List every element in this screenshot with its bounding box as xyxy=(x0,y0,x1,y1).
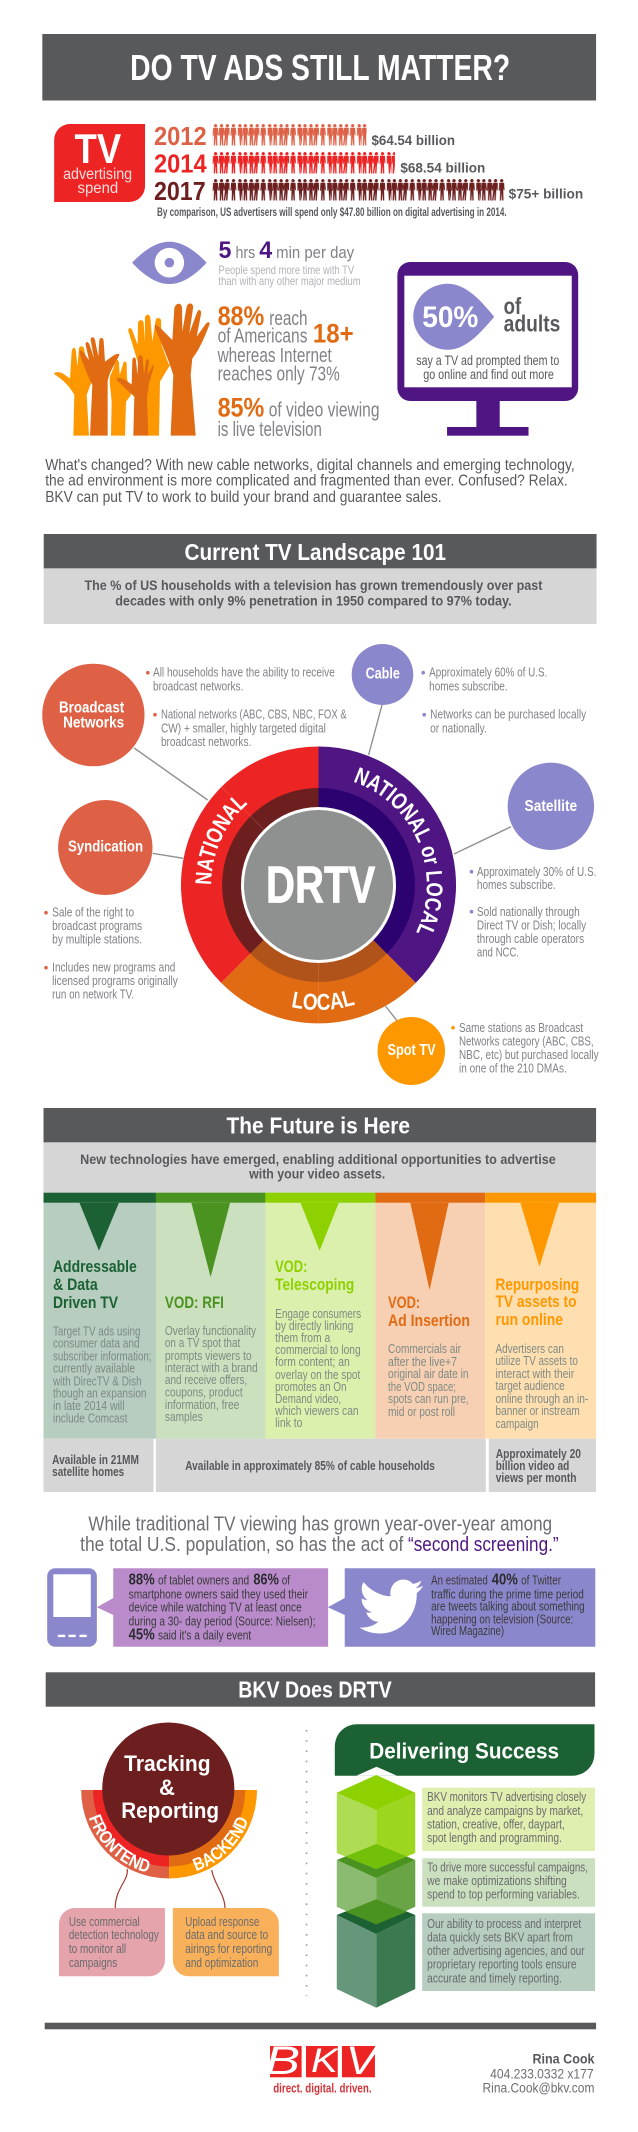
column: VOD Ad Insertion: spots can run pre, xyxy=(388,1392,469,1406)
availability row: Available in 21MM xyxy=(52,1452,139,1467)
callout: Broadcast Networks: Networks xyxy=(63,715,124,732)
stat: live television: is live television xyxy=(218,419,322,441)
chart: DRTV donut: LOCAL xyxy=(292,991,355,1010)
panel: Twitter stat: Wired Magazine) xyxy=(431,1623,504,1638)
contact details: 404.233.0332 x177 xyxy=(490,2067,594,2082)
icon: TV monitor with 50% of adults xyxy=(397,262,578,436)
callout: Syndication: Includes new programs and xyxy=(52,960,175,975)
callout: Syndication: Syndication xyxy=(68,839,143,856)
logo: BKV xyxy=(265,2039,380,2096)
stat: hours per day: than with any other major medium xyxy=(219,276,361,288)
callout: Satellite: Sold nationally through xyxy=(477,904,580,919)
column: VOD RFI: Overlay functionality xyxy=(165,1324,257,1338)
text block: monitoring: BKV monitors TV advertising closely xyxy=(427,1789,587,1804)
panel: section header Current TV Landscape 101: The % of US households with a television has grown tremendously over past xyxy=(84,578,543,593)
icon: TV monitor with 50% of adults: go online and find out more xyxy=(423,366,554,382)
heading: second screening xyxy=(80,1514,559,1556)
stat: reach of Americans: reach xyxy=(269,308,307,330)
stat: reach of Americans: 18+ xyxy=(313,319,354,349)
column: VOD Telescoping: Telescoping xyxy=(275,1275,354,1294)
panel: TV advertising spend xyxy=(54,123,583,219)
icon: TV monitor with 50% of adults: 50% xyxy=(422,301,478,334)
chart: DRTV donut xyxy=(180,746,456,1024)
column: Repurposing TV assets to run online: TV assets to xyxy=(496,1292,577,1311)
text block: monitoring: station, creative, offer, daypart, xyxy=(427,1816,565,1831)
contact details: Rina Cook xyxy=(532,2052,595,2067)
panel: Tracking and Reporting: & xyxy=(159,1775,175,1800)
panel: section header The Future is Here: with your video assets. xyxy=(248,1167,385,1182)
column: VOD Telescoping: by directly linking xyxy=(275,1319,353,1333)
availability row: Available in approximately 85% of cable households xyxy=(185,1458,435,1473)
callout: Cable: or nationally. xyxy=(430,721,487,736)
panel: Tracking and Reporting: Tracking xyxy=(124,1751,211,1776)
text block: optimization xyxy=(422,1858,595,1907)
column: VOD RFI: and receive offers, xyxy=(165,1373,247,1387)
badge: TV advertising spend: TV xyxy=(75,125,121,172)
panel: section header Current TV Landscape 101 xyxy=(44,534,597,624)
column: VOD Telescoping: Engage consumers xyxy=(275,1307,361,1321)
callout: Satellite: Satellite xyxy=(525,798,577,815)
card: backend xyxy=(173,1908,279,1976)
text block: optimization: spend to top performing variables. xyxy=(427,1886,580,1901)
row: 2012 spend xyxy=(154,123,455,151)
callout: Satellite xyxy=(470,763,596,960)
availability row: views per month xyxy=(496,1470,577,1485)
callout: Syndication: Sale of the right to xyxy=(52,905,134,920)
chart: DRTV donut: DRTV xyxy=(266,855,376,913)
panel: Tracking and Reporting: Reporting xyxy=(121,1798,219,1823)
logo: BKV: direct. digital. driven. xyxy=(273,2082,372,2096)
heading: second screening: While traditional TV viewing has grown year-over-year among xyxy=(88,1514,552,1536)
icon: TV monitor with 50% of adults: of xyxy=(504,293,521,319)
icon: raised hands xyxy=(54,304,210,436)
callout: Cable: Networks can be purchased locally xyxy=(430,707,587,722)
badge: TV advertising spend: spend xyxy=(77,180,118,197)
column: VOD Telescoping: overlay on the spot xyxy=(275,1368,361,1382)
panel: section header Current TV Landscape 101: Current TV Landscape 101 xyxy=(184,539,446,565)
logo: BKV: K xyxy=(311,2042,339,2080)
column: Repurposing TV assets to run online: banner or instream xyxy=(496,1404,580,1418)
column: Addressable and Data Driven TV: Target TV ads using xyxy=(53,1324,141,1338)
column: VOD Telescoping: link to xyxy=(275,1416,303,1430)
text block: optimization: we make optimizations shifting xyxy=(426,1873,567,1888)
panel: tablet and smartphone stat: said it's a daily event xyxy=(158,1627,252,1642)
column: VOD Ad Insertion: mid or post roll xyxy=(388,1405,455,1419)
callout: Satellite: through cable operators xyxy=(477,931,584,946)
column: Repurposing TV assets to run online: Repurposing xyxy=(496,1275,579,1294)
intro paragraph: BKV can put TV to work to build your brand and guarantee sales. xyxy=(45,489,442,506)
row: 2012 spend: 2012 xyxy=(154,123,207,151)
comparison note: By comparison, US advertisers will spend only $47.80 billion on digital advertising in 2014. xyxy=(157,207,507,219)
column: VOD RFI xyxy=(156,1193,265,1439)
heading: second screening: the total U.S. population, so has the act of xyxy=(80,1534,404,1556)
banner: Delivering Success: Delivering Success xyxy=(369,1738,559,1763)
stat: reach of Americans: whereas Internet xyxy=(217,345,332,367)
callout: Spot TV: in one of the 210 DMAs. xyxy=(459,1061,567,1076)
stat: live television: of video viewing xyxy=(269,400,380,422)
column: Repurposing TV assets to run online: run online xyxy=(496,1310,563,1329)
panel: Twitter stat: happening on television (Source: xyxy=(431,1611,573,1626)
availability row: billion video ad xyxy=(496,1458,569,1473)
badge: TV advertising spend xyxy=(54,124,145,202)
column: VOD Ad Insertion: VOD: xyxy=(388,1293,420,1312)
text block: monitoring xyxy=(422,1788,595,1851)
column: Addressable and Data Driven TV: include Comcast xyxy=(53,1412,128,1426)
text block: reporting tools: accurate and timely reporting. xyxy=(427,1971,562,1986)
column: Repurposing TV assets to run online: utilize TV assets to xyxy=(496,1354,578,1368)
icon: smartphone xyxy=(47,1568,97,1647)
column: Addressable and Data Driven TV: Driven TV xyxy=(53,1293,119,1312)
column: Repurposing TV assets to run online: target audience xyxy=(496,1379,565,1393)
stat: hours per day: People spend more time with TV xyxy=(219,265,354,277)
column: VOD Telescoping xyxy=(265,1193,375,1439)
card: backend: airings for reporting xyxy=(185,1941,272,1956)
column: VOD RFI: information, free xyxy=(165,1398,239,1412)
column: Addressable and Data Driven TV: subscriber information; xyxy=(53,1350,152,1364)
stat: reach of Americans: of Americans xyxy=(218,326,308,348)
callout: Broadcast Networks: broadcast networks. xyxy=(161,734,251,749)
section header: BKV Does DRTV xyxy=(46,1672,595,1707)
card: frontend: detection technology xyxy=(69,1927,159,1942)
column: Repurposing TV assets to run online: interact with their xyxy=(496,1367,574,1381)
callout: Spot TV: Networks category (ABC, CBS, xyxy=(459,1034,594,1049)
availability row: Approximately 20 xyxy=(496,1446,581,1461)
stat: hours per day: min per day xyxy=(276,243,355,262)
panel: Delivering Success xyxy=(335,1724,595,2008)
column: Addressable and Data Driven TV xyxy=(44,1193,156,1439)
row: 2014 spend: $68.54 billion xyxy=(400,160,485,176)
callout: Satellite: Approximately 30% of U.S. xyxy=(477,864,596,879)
logo: BKV: B xyxy=(265,2039,300,2083)
stat: reach of Americans: 88% xyxy=(218,301,264,331)
intro paragraph xyxy=(45,457,575,506)
contact details xyxy=(483,2052,595,2096)
card: frontend xyxy=(59,1908,165,1976)
stat: hours per day xyxy=(219,237,361,288)
callout: Spot TV: NBC, etc) but purchased locally xyxy=(459,1047,599,1062)
column: Addressable and Data Driven TV: with DirecTV & Dish xyxy=(52,1375,142,1389)
callout: Broadcast Networks: All households have the ability to receive xyxy=(153,665,335,680)
column: Repurposing TV assets to run online: campaign xyxy=(496,1417,539,1431)
panel: Twitter stat xyxy=(328,1568,595,1647)
panel: Twitter stat: An estimated xyxy=(431,1572,488,1587)
column: Addressable and Data Driven TV: consumer data and xyxy=(53,1337,140,1351)
column: VOD Telescoping: which viewers can xyxy=(274,1404,359,1418)
row: 2017 spend xyxy=(154,178,583,206)
panel: section header The Future is Here xyxy=(44,1108,596,1193)
column: VOD Ad Insertion: Commercials air xyxy=(388,1342,461,1356)
callout: Satellite: and NCC. xyxy=(477,945,519,960)
text block: reporting tools: other advertising agencies, and our xyxy=(427,1943,585,1958)
panel: Twitter stat: 40% xyxy=(492,1571,518,1588)
panel: Twitter stat: of Twitter xyxy=(521,1572,562,1587)
column: VOD RFI: prompts viewers to xyxy=(165,1349,252,1363)
panel: Tracking and Reporting: FRONTEND xyxy=(89,1814,150,1872)
callout: Broadcast Networks: broadcast networks. xyxy=(153,679,243,694)
callout: Cable: Approximately 60% of U.S. xyxy=(429,665,547,680)
card: backend: data and source to xyxy=(185,1927,268,1942)
title banner: DO TV ADS STILL MATTER? xyxy=(130,48,510,88)
logo: BKV: V xyxy=(346,2039,380,2083)
callout: Syndication: broadcast programs xyxy=(52,918,142,933)
callout: Broadcast Networks: CW) + smaller, highly targeted digital xyxy=(161,721,326,736)
column: VOD Telescoping: VOD: xyxy=(275,1257,307,1276)
column: VOD Telescoping: Demand video, xyxy=(275,1392,341,1406)
column: Addressable and Data Driven TV: & Data xyxy=(53,1275,98,1294)
callout: Syndication xyxy=(44,800,178,1002)
column: VOD Telescoping: promotes an On xyxy=(275,1380,347,1394)
panel: section header The Future is Here: The Future is Here xyxy=(227,1112,410,1138)
icon: TV monitor with 50% of adults: say a TV ad prompted them to xyxy=(416,352,559,368)
banner: Delivering Success xyxy=(335,1724,594,1776)
section header: BKV Does DRTV: BKV Does DRTV xyxy=(238,1677,392,1703)
column: VOD RFI: samples xyxy=(165,1410,203,1424)
column: VOD Ad Insertion: after the live+7 xyxy=(388,1355,457,1369)
card: frontend: to monitor all xyxy=(69,1941,126,1956)
icon: eye xyxy=(132,242,207,284)
column: Addressable and Data Driven TV: in late 2014 will xyxy=(53,1399,125,1413)
callout: Spot TV: Spot TV xyxy=(387,1042,436,1059)
column: VOD Ad Insertion xyxy=(375,1193,485,1439)
column: Repurposing TV assets to run online xyxy=(485,1193,596,1439)
icon: stacked cubes xyxy=(337,1775,415,2008)
callout: Broadcast Networks xyxy=(42,664,347,766)
row: 2014 spend xyxy=(154,150,485,179)
card: backend: Upload response xyxy=(185,1914,259,1929)
column: Repurposing TV assets to run online: Advertisers can xyxy=(496,1342,564,1356)
panel: Tracking and Reporting: BACKEND xyxy=(192,1817,247,1871)
panel: Twitter stat: traffic during the prime time period xyxy=(431,1586,584,1601)
column: VOD Ad Insertion: original air date in xyxy=(388,1367,469,1381)
availability row xyxy=(44,1439,596,1492)
callout: Syndication: run on network TV. xyxy=(52,987,134,1002)
callout: Spot TV: Same stations as Broadcast xyxy=(459,1020,583,1035)
column: VOD Telescoping: them from a xyxy=(275,1331,330,1345)
column: VOD Ad Insertion: Ad Insertion xyxy=(388,1311,470,1330)
panel: Twitter stat: are tweets talking about something xyxy=(431,1599,585,1614)
column: VOD RFI: VOD: RFI xyxy=(165,1293,224,1312)
connector lines xyxy=(134,705,511,1021)
callout: Cable xyxy=(352,644,587,736)
column: VOD Ad Insertion: the VOD space; xyxy=(388,1380,456,1394)
card: backend: and optimization xyxy=(185,1955,258,1970)
chart: DRTV donut: NATIONAL xyxy=(195,797,248,884)
panel: tablet and smartphone stat: smartphone owners said they used their xyxy=(129,1586,309,1601)
panel: tablet and smartphone stat: 86% xyxy=(253,1571,279,1588)
text block: monitoring: spot length and programming. xyxy=(427,1830,562,1845)
panel: section header Current TV Landscape 101: decades with only 9% penetration in 1950 compared to 97% today. xyxy=(115,593,512,608)
column: Repurposing TV assets to run online: online through an in- xyxy=(496,1392,588,1406)
row: 2017 spend: 2017 xyxy=(154,178,206,206)
stat: hours per day: hrs xyxy=(235,243,255,262)
callout: Syndication: by multiple stations. xyxy=(52,932,142,947)
contact details: Rina.Cook@bkv.com xyxy=(483,2081,594,2096)
column: Addressable and Data Driven TV: Addressable xyxy=(53,1257,137,1276)
chart: DRTV donut: NATIONAL or LOCAL xyxy=(354,767,443,934)
row: 2012 spend: $64.54 billion xyxy=(372,132,455,148)
icon: Twitter bird xyxy=(359,1580,423,1634)
callout: Syndication: licensed programs originally xyxy=(52,973,178,988)
callout: Satellite: Direct TV or Dish; locally xyxy=(477,918,587,933)
panel: tablet and smartphone stat: of tablet owners and xyxy=(158,1572,249,1587)
intro paragraph: What's changed? With new cable networks, digital channels and emerging technology, xyxy=(45,457,575,474)
column: Addressable and Data Driven TV: though an expansion xyxy=(53,1387,147,1401)
callout: Broadcast Networks: Broadcast xyxy=(59,700,125,717)
panel: Tracking and Reporting xyxy=(59,1722,279,1976)
column: VOD Telescoping: form content; an xyxy=(275,1355,350,1369)
row: 2017 spend: $75+ billion xyxy=(509,186,583,202)
panel: section header The Future is Here: New technologies have emerged, enabling additional opportunities to advertise xyxy=(80,1152,556,1167)
badge: TV advertising spend: advertising xyxy=(63,166,132,183)
callout: Cable: homes subscribe. xyxy=(429,679,508,694)
stat: hours per day: 5 xyxy=(219,237,231,264)
callout: Broadcast Networks: National networks (ABC, CBS, NBC, FOX & xyxy=(161,707,347,722)
callout: Spot TV xyxy=(378,1017,599,1085)
card: frontend: campaigns xyxy=(69,1955,117,1970)
panel: tablet and smartphone stat: device while watching TV at least once xyxy=(129,1600,302,1615)
panel: tablet and smartphone stat: of xyxy=(282,1572,290,1587)
card: frontend: Use commercial xyxy=(69,1914,140,1929)
column: VOD RFI: interact with a brand xyxy=(165,1361,258,1375)
text block: reporting tools xyxy=(422,1913,595,1991)
column: VOD RFI: on a TV spot that xyxy=(165,1336,241,1350)
stat: live television xyxy=(218,393,380,441)
column: VOD Telescoping: commercial to long xyxy=(275,1343,361,1357)
panel: tablet and smartphone stat: 45% xyxy=(129,1626,155,1643)
panel: tablet and smartphone stat xyxy=(97,1568,328,1647)
title banner xyxy=(42,34,596,100)
stat: reach of Americans xyxy=(217,301,354,386)
column: Addressable and Data Driven TV: currently available xyxy=(53,1362,135,1376)
icon: TV monitor with 50% of adults: adults xyxy=(504,311,560,337)
stat: live television: 85% xyxy=(218,393,264,423)
stat: hours per day: 4 xyxy=(259,237,273,264)
callout: Cable: Cable xyxy=(366,666,400,683)
row: 2014 spend: 2014 xyxy=(154,150,207,179)
text block: monitoring: and analyze campaigns by market, xyxy=(427,1803,583,1818)
panel: tablet and smartphone stat: during a 30- day period (Source: Nielsen); xyxy=(129,1614,316,1629)
text block: reporting tools: data quickly sets BKV apart from xyxy=(427,1930,573,1945)
heading: second screening: “second screening.” xyxy=(408,1534,559,1556)
column: VOD RFI: coupons, product xyxy=(165,1385,243,1399)
text block: reporting tools: proprietary reporting tools ensure xyxy=(427,1957,577,1972)
text block: optimization: To drive more successful campaigns, xyxy=(427,1860,588,1875)
intro paragraph: the ad environment is more complicated and fragmented than ever. Confused? Relax. xyxy=(45,473,568,490)
panel: tablet and smartphone stat: 88% xyxy=(129,1571,155,1588)
availability row: satellite homes xyxy=(52,1464,124,1479)
text block: reporting tools: Our ability to process and interpret xyxy=(427,1916,581,1931)
stat: reach of Americans: reaches only 73% xyxy=(218,364,340,386)
callout: Satellite: homes subscribe. xyxy=(477,877,556,892)
